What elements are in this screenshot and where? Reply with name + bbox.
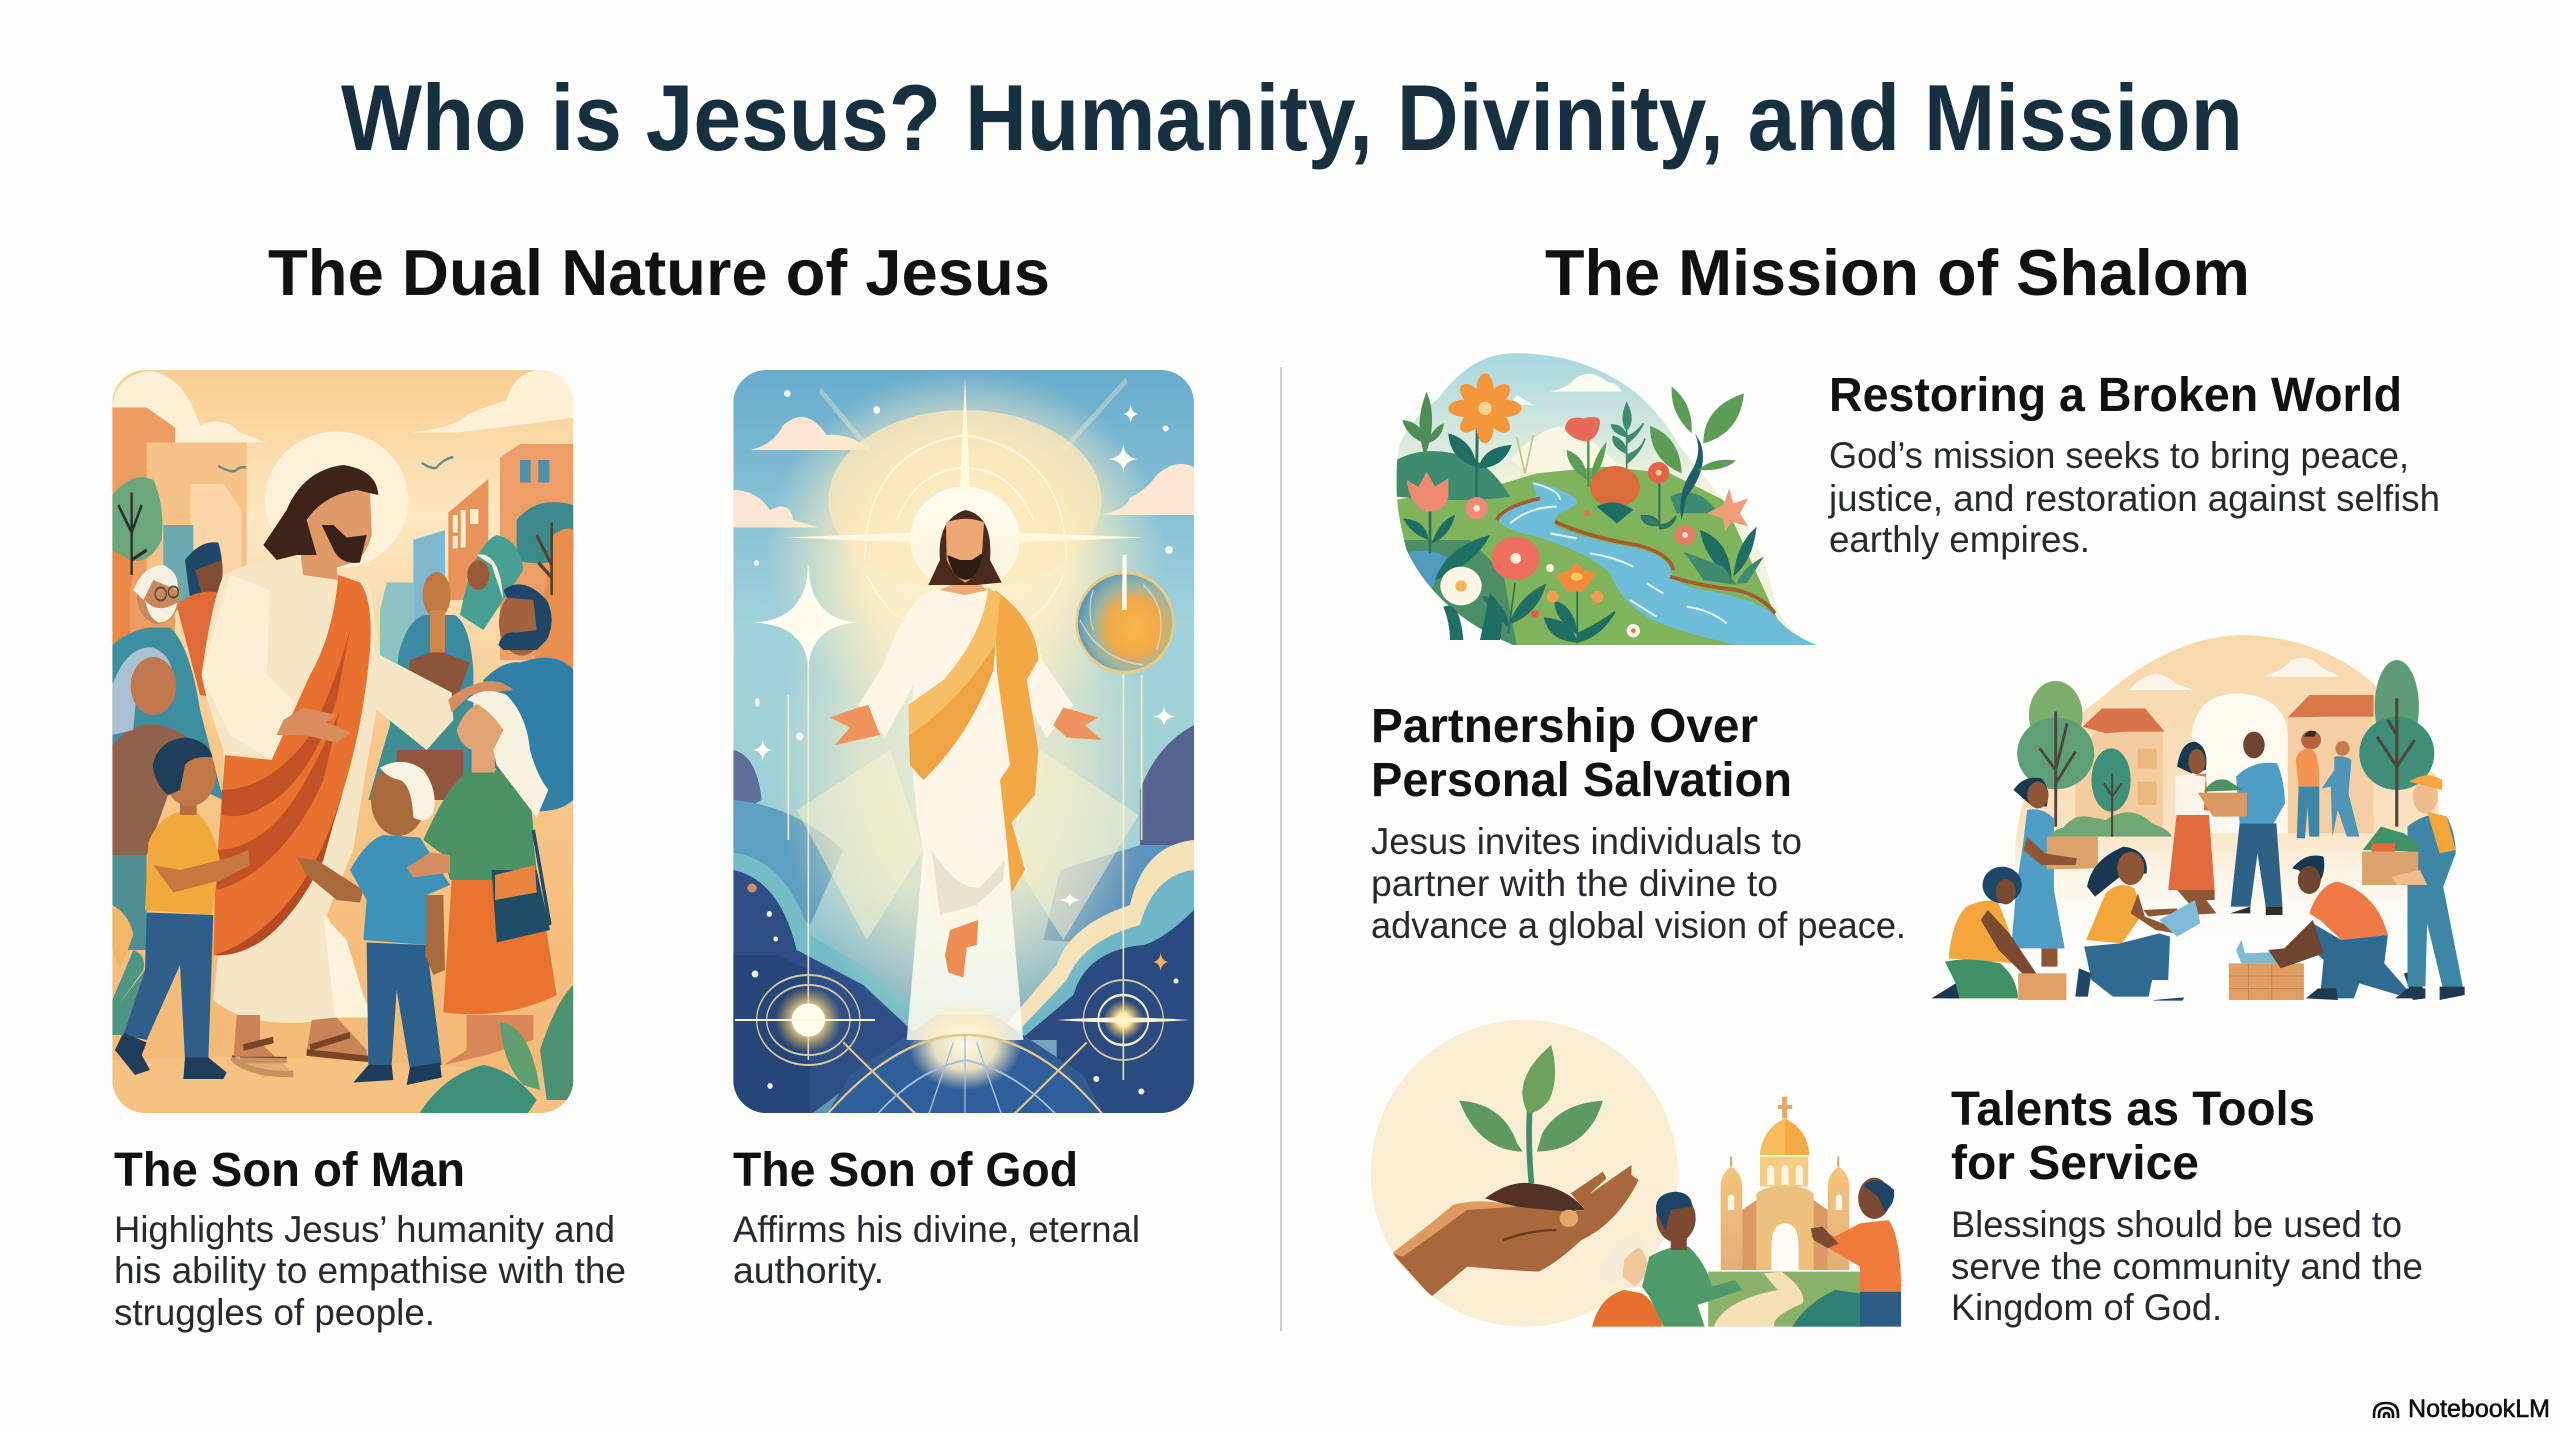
text block: restoring description: earthly empires.: [1829, 519, 2090, 560]
text block: talents description: [1951, 1204, 2423, 1328]
illustration: restored garden with river: [1390, 350, 1823, 650]
text block: talents description: Kingdom of God.: [1951, 1287, 2222, 1328]
heading: partnership over personal salvation: Partnership Over: [1371, 700, 1758, 753]
icon: NotebookLM logo: [2374, 1403, 2398, 1418]
heading: restoring a broken world: Restoring a Broken World: [1829, 369, 2402, 422]
heading: partnership over personal salvation: [1371, 700, 1792, 807]
text block: talents description: Blessings should be used to: [1951, 1204, 2402, 1245]
heading: talents as tools for service: for Service: [1951, 1137, 2199, 1190]
heading: the mission of shalom: The Mission of Shalom: [1545, 236, 2250, 309]
text block: partnership description: [1371, 821, 1906, 946]
text block: partnership description: advance a global vision of peace.: [1371, 905, 1906, 946]
text block: son of god description: authority.: [733, 1250, 884, 1291]
heading: partnership over personal salvation: Personal Salvation: [1371, 754, 1792, 807]
title: Who is Jesus? Humanity, Divinity, and Mission: [341, 65, 2243, 170]
text block: son of man description: struggles of people.: [114, 1292, 435, 1333]
illustration: the son of man card: [112, 370, 573, 1115]
text block: son of god description: Affirms his divine, eternal: [733, 1209, 1140, 1250]
text block: son of man description: Highlights Jesus’ humanity and: [114, 1209, 615, 1250]
text block: son of man description: [114, 1209, 626, 1333]
text block: son of man description: his ability to empathise with the: [114, 1250, 626, 1291]
illustration: the son of god card: [733, 370, 1194, 1115]
heading: talents as tools for service: Talents as Tools: [1951, 1083, 2315, 1136]
text block: son of god description: [733, 1209, 1140, 1291]
heading: the dual nature of Jesus: The Dual Nature of Jesus: [268, 236, 1050, 309]
illustration: seedling in hand, church and community: [1371, 1020, 1901, 1327]
text block: restoring description: [1828, 435, 2440, 560]
text block: talents description: serve the community and the: [1951, 1246, 2423, 1287]
text block: partnership description: Jesus invites individuals to: [1371, 821, 1802, 862]
heading: the son of man: The Son of Man: [114, 1144, 465, 1197]
heading: the son of god: The Son of God: [733, 1144, 1078, 1197]
text block: restoring description: justice, and restoration against selfish: [1828, 478, 2440, 519]
brand label: NotebookLM: NotebookLM: [2408, 1395, 2550, 1423]
text block: partnership description: partner with the divine to: [1371, 863, 1778, 904]
text block: restoring description: God’s mission seeks to bring peace,: [1829, 435, 2409, 476]
illustration: community working together: [1931, 635, 2465, 1001]
heading: talents as tools for service: [1951, 1083, 2315, 1190]
